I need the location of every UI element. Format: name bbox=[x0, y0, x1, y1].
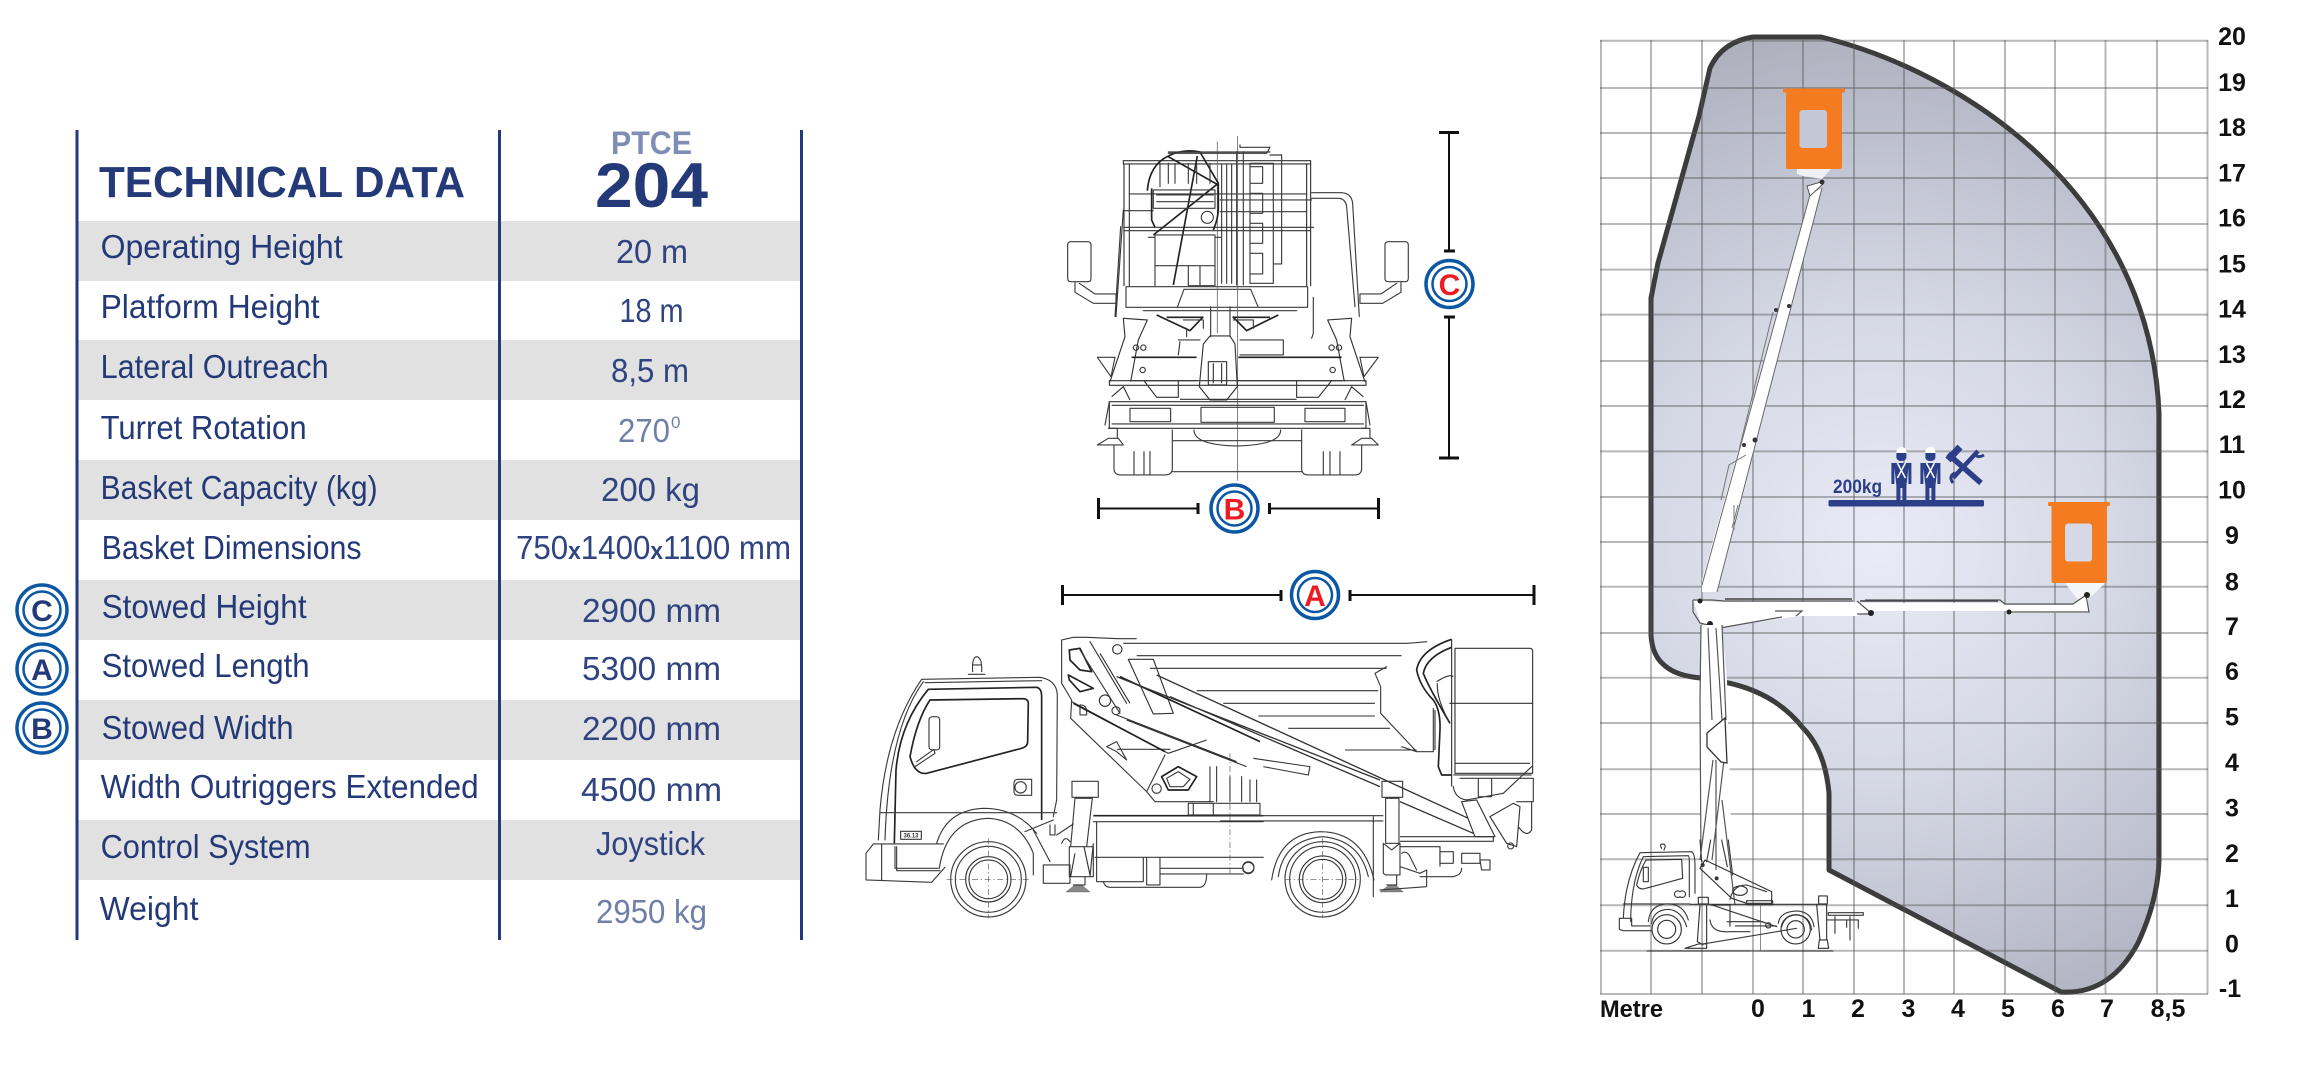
chart: working envelope area bbox=[1651, 37, 2159, 992]
cab: 36.13 bbox=[904, 834, 919, 840]
drawing: truck side view bbox=[866, 637, 1263, 918]
platform bar bbox=[1828, 500, 1984, 506]
chart: height scale labels: 3 bbox=[2225, 794, 2239, 822]
chart: height scale labels: 15 bbox=[2218, 250, 2246, 278]
row labels: Stowed Width bbox=[102, 709, 294, 746]
dimension line A: A bbox=[1304, 580, 1326, 613]
row values: 2950 kg bbox=[596, 893, 707, 930]
chart: height scale labels: 12 bbox=[2218, 386, 2246, 414]
row values: 18 m bbox=[620, 292, 684, 329]
icon: lower basket bbox=[2048, 502, 2110, 600]
icon: badge C in table bbox=[17, 585, 67, 635]
chart: height scale labels: 8 bbox=[2225, 568, 2239, 596]
row labels: Turret Rotation bbox=[101, 409, 307, 446]
chart: height scale labels: 16 bbox=[2218, 204, 2246, 232]
chart: height scale labels: 17 bbox=[2218, 160, 2246, 188]
dimension line C bbox=[1426, 132, 1473, 458]
chart: outreach scale labels: 4 bbox=[1951, 995, 1965, 1023]
icon: worker 2 bbox=[1920, 447, 1940, 503]
row values: 4500 mm bbox=[581, 771, 722, 808]
dimension line C: C bbox=[1439, 269, 1460, 302]
boom horizontal lines and rear of truck bbox=[1117, 643, 1473, 833]
front wheel bbox=[937, 808, 1037, 918]
row values: 270 bbox=[618, 412, 670, 449]
cab bbox=[866, 657, 1057, 882]
chart: height scale labels: 20 bbox=[2218, 23, 2246, 51]
chart: outreach scale labels: 0 bbox=[1751, 995, 1765, 1023]
row labels: Basket Dimensions bbox=[102, 529, 362, 566]
row labels: Basket Capacity (kg) bbox=[101, 469, 378, 506]
chart: outreach scale labels: 1 bbox=[1802, 995, 1816, 1023]
row values: 5300 mm bbox=[582, 650, 721, 687]
chart: height scale labels: 6 bbox=[2225, 658, 2239, 686]
chart: height scale labels: 0 bbox=[2225, 930, 2239, 958]
chart: height scale labels: 19 bbox=[2218, 69, 2246, 97]
row labels: Stowed Length bbox=[102, 647, 310, 684]
icon: badge A in table bbox=[17, 644, 67, 694]
row values: 2200 mm bbox=[582, 710, 721, 747]
chart: outreach scale labels: 7 bbox=[2100, 995, 2114, 1023]
chart: height scale labels: 5 bbox=[2225, 704, 2239, 732]
row labels: Stowed Height bbox=[102, 588, 307, 625]
heading: model number: 204 bbox=[595, 151, 708, 221]
row labels: Operating Height bbox=[101, 228, 343, 265]
drawing: horizontal boom bbox=[1693, 592, 2090, 628]
chart: height scale labels: 2 bbox=[2225, 840, 2239, 868]
chart: height scale labels bbox=[2218, 23, 2246, 1003]
panel: technical data table bbox=[76, 125, 803, 940]
chart: outreach scale labels: 8,5 bbox=[2151, 995, 2185, 1023]
chart: outreach scale labels: 5 bbox=[2001, 995, 2015, 1023]
lower boom arms bbox=[1072, 653, 1260, 767]
row stripes bbox=[78, 221, 800, 880]
drawing: raised boom bbox=[1702, 180, 1824, 592]
chart: grid lines bbox=[1600, 40, 2208, 994]
dimension line B bbox=[1098, 485, 1378, 532]
icon: badge B in table bbox=[17, 703, 67, 753]
row values: 200 kg bbox=[601, 471, 700, 508]
table column rules bbox=[76, 130, 803, 940]
row values: 750x1400x1100 mm bbox=[516, 529, 791, 566]
chart: outreach scale labels: 6 bbox=[2051, 995, 2065, 1023]
chart: outreach scale labels: 2 bbox=[1851, 995, 1865, 1023]
boom head and basket bbox=[1375, 639, 1533, 849]
chart: height scale labels: 7 bbox=[2225, 613, 2239, 641]
icon: upper basket bbox=[1783, 88, 1845, 179]
front outrigger bbox=[1025, 781, 1098, 892]
drawing: lower arm bbox=[1700, 625, 1735, 905]
heading: technical data: TECHNICAL DATA bbox=[99, 158, 465, 207]
icon: crossed tools bbox=[1948, 447, 1984, 483]
row labels: Weight bbox=[100, 890, 198, 927]
dimension line A bbox=[1062, 572, 1534, 618]
chart: outreach scale labels: 3 bbox=[1902, 995, 1915, 1023]
chart: height scale labels: 14 bbox=[2218, 296, 2246, 324]
rear wheel and rear outrigger bbox=[1220, 781, 1493, 918]
heading: model prefix: PTCE bbox=[611, 125, 692, 161]
icon: badge A in table: A bbox=[31, 654, 53, 687]
chart: height scale labels: 13 bbox=[2218, 341, 2246, 369]
chart: outreach scale labels bbox=[1600, 995, 2185, 1023]
row values: 2900 mm bbox=[582, 592, 721, 629]
chassis and locker bbox=[1093, 753, 1263, 887]
label: 200kg: 200kg bbox=[1833, 477, 1882, 498]
row values: Joystick bbox=[596, 825, 705, 862]
chart: height scale labels: 1 bbox=[2225, 885, 2239, 913]
dimension line B: B bbox=[1224, 494, 1245, 526]
chart: height scale labels: 9 bbox=[2225, 522, 2239, 550]
drawing: truck front view bbox=[1068, 136, 1408, 481]
capacity legend: 200kg, two workers, tools bbox=[1828, 447, 1984, 506]
row labels bbox=[100, 228, 479, 927]
chart: height scale labels: -1 bbox=[2219, 975, 2241, 1003]
drawing: small truck on chart bbox=[1619, 840, 1863, 951]
row labels: Platform Height bbox=[101, 288, 320, 325]
boom base bbox=[1062, 637, 1260, 815]
icon: worker 1 bbox=[1891, 447, 1911, 503]
row values: 20 m bbox=[616, 233, 688, 270]
chart: height scale labels: 11 bbox=[2219, 431, 2245, 459]
chart: height scale labels: 4 bbox=[2225, 749, 2239, 777]
row labels: Width Outriggers Extended bbox=[101, 768, 479, 805]
icon: badge C in table: C bbox=[31, 595, 53, 628]
chart: height scale labels: 18 bbox=[2218, 114, 2246, 142]
icon: badge B in table: B bbox=[31, 713, 53, 746]
row values: 0 bbox=[671, 413, 680, 432]
chart: outreach scale labels: Metre bbox=[1600, 996, 1663, 1023]
row values bbox=[516, 233, 791, 930]
row values: 8,5 m bbox=[611, 352, 689, 389]
row labels: Control System bbox=[101, 828, 311, 865]
chart: height scale labels: 10 bbox=[2218, 476, 2246, 504]
row labels: Lateral Outreach bbox=[101, 348, 329, 385]
